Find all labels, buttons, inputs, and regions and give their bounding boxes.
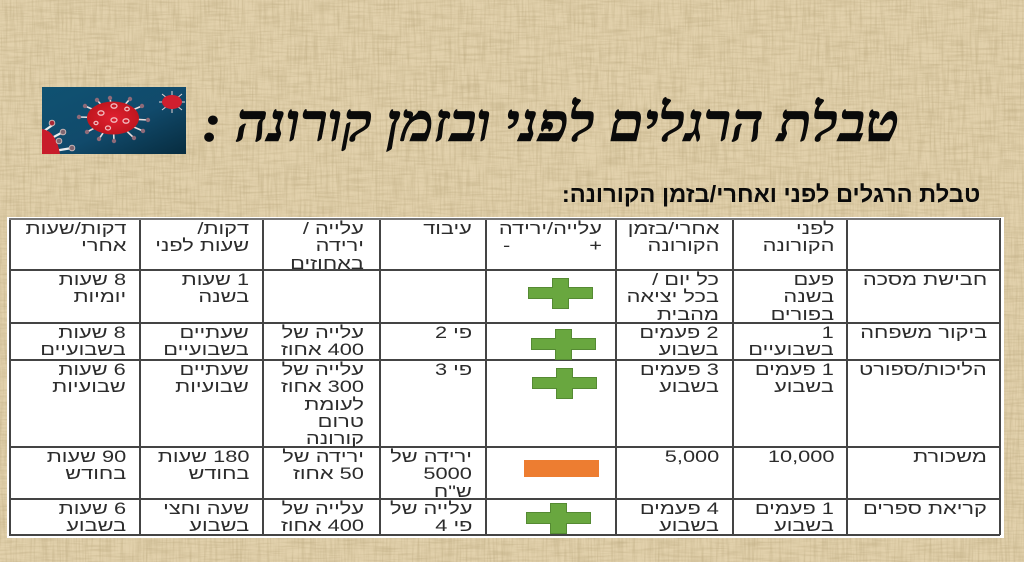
row: salary: 5000 [424, 465, 472, 483]
row: walks and sport: בשבוע [659, 378, 719, 396]
row: walks and sport: שבועיות [175, 378, 249, 396]
row: mask wearing: חבישת מסכה [863, 271, 987, 289]
icon: minus, salary [524, 460, 599, 477]
row: mask wearing: יומיות [73, 288, 126, 306]
row: reading books: בשבוע [774, 517, 834, 535]
row: family visit: 8 שעות [59, 324, 126, 342]
header row: אחרי/בזמן [627, 220, 719, 238]
row: reading books: בשבוע [659, 517, 719, 535]
header row: ירידה [316, 237, 364, 255]
row: family visit: 2 פעמים [640, 324, 719, 342]
title: טבלת הרגלים לפני ובזמן קורונה : [202, 95, 899, 153]
row: reading books: שעה וחצי [163, 500, 249, 518]
row: mask wearing: בשנה [783, 288, 834, 306]
row: salary: 5,000 [664, 448, 719, 466]
row: walks and sport: פי 3 [435, 361, 472, 379]
header row: דקות/ [197, 220, 249, 238]
row: walks and sport: הליכות/ספורט [859, 361, 987, 379]
row: walks and sport: 3 פעמים [640, 361, 719, 379]
row: salary: משכורת [913, 448, 987, 466]
header row: עלייה / [303, 220, 364, 238]
row: mask wearing: פעם [793, 271, 834, 289]
row: family visit: 1 [822, 324, 834, 342]
header row: הקורונה [762, 237, 834, 255]
header row: - [503, 237, 510, 255]
row: reading books: קריאת ספרים [863, 500, 987, 518]
icon: plus, reading books [526, 503, 591, 534]
row: walks and sport: לעומת [304, 396, 364, 414]
row: walks and sport: שבועיות [52, 378, 126, 396]
row: mask wearing: מהבית [657, 306, 719, 324]
row: mask wearing: בשנה [198, 288, 249, 306]
row: reading books: בשבוע [189, 517, 249, 535]
row: salary: בחודש [65, 465, 126, 483]
row: mask wearing: 1 שעות [182, 271, 249, 289]
header row: דקות/שעות [25, 220, 126, 238]
header row: שעות לפני [155, 237, 249, 255]
row: reading books: עלייה של [282, 500, 364, 518]
row: walks and sport: קורונה [306, 430, 364, 448]
header row: עלייה/ירידה [499, 220, 602, 238]
row: mask wearing: כל יום / [652, 271, 719, 289]
row: mask wearing [59, 271, 987, 324]
table [7, 217, 1004, 538]
row: mask wearing: 8 שעות [59, 271, 126, 289]
row: walks and sport: עלייה של [282, 361, 364, 379]
row: walks and sport: 300 אחוז [281, 378, 364, 396]
row: salary: 90 שעות [46, 448, 126, 466]
header row: לפני [795, 220, 834, 238]
row: salary: ירידה של [282, 448, 364, 466]
icon: coronavirus image [42, 87, 186, 154]
row: reading books: 400 אחוז [281, 517, 364, 535]
row: family visit: שעתיים [180, 324, 249, 342]
row: salary: 10,000 [767, 448, 834, 466]
header row: באחוזים [290, 255, 364, 273]
row: family visit: עלייה של [282, 324, 364, 342]
row: reading books: 6 שעות [59, 500, 126, 518]
icon: plus, family visit [531, 329, 596, 360]
header row: עיבוד [423, 220, 472, 238]
row: family visit: בשבועיים [748, 341, 834, 359]
row: family visit: בשבועיים [40, 341, 126, 359]
row: salary: בחודש [188, 465, 249, 483]
icon: plus, mask wearing [528, 278, 593, 309]
row: salary: ירידה של [390, 448, 472, 466]
row: walks and sport: טרום [318, 413, 364, 431]
row: family visit: ביקור משפחה [860, 324, 987, 342]
row: reading books [59, 500, 987, 535]
row: reading books: בשבוע [66, 517, 126, 535]
row: walks and sport: 6 שעות [59, 361, 126, 379]
row: salary: 50 אחוז [293, 465, 364, 483]
row: walks and sport [52, 361, 987, 448]
row: reading books: 1 פעמים [755, 500, 834, 518]
header row: הקורונה [647, 237, 719, 255]
row: walks and sport: בשבוע [774, 378, 834, 396]
row: reading books: פי 4 [435, 517, 472, 535]
row: family visit: פי 2 [435, 324, 472, 342]
row: mask wearing: בכל יציאה [627, 288, 719, 306]
row: salary: 180 שעות [157, 448, 249, 466]
header row: + [589, 237, 602, 255]
row: family visit [40, 324, 987, 359]
row: family visit: 400 אחוז [281, 341, 364, 359]
row: salary: ש"ח [434, 483, 472, 501]
row: family visit: בשבועיים [163, 341, 249, 359]
icon: plus, walks and sport [532, 368, 597, 399]
row: walks and sport: 1 פעמים [755, 361, 834, 379]
header row [25, 220, 834, 273]
row: reading books: עלייה של [390, 500, 472, 518]
row: family visit: בשבוע [659, 341, 719, 359]
subtitle: טבלת הרגלים לפני ואחרי/בזמן הקורונה: [562, 181, 980, 207]
row: reading books: 4 פעמים [640, 500, 719, 518]
row: walks and sport: שעתיים [180, 361, 249, 379]
row: mask wearing: בפורים [770, 306, 834, 324]
header row: אחרי [81, 237, 126, 255]
row: salary [46, 448, 987, 501]
